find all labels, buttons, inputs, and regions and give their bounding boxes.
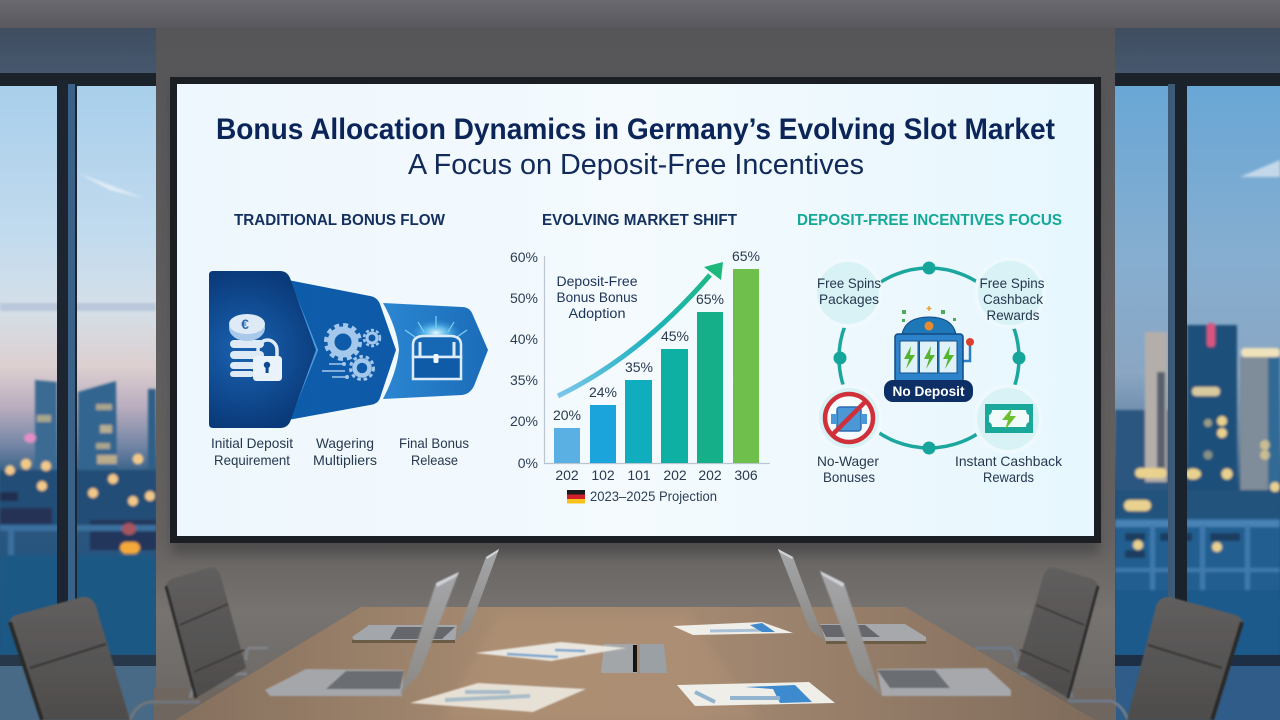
- y axis labels: 20%: [510, 413, 538, 429]
- x axis labels: 102: [591, 467, 615, 483]
- laptop: rear left: [352, 549, 499, 643]
- chevron: initial deposit: [209, 271, 316, 428]
- label: initial deposit requirement: [211, 435, 293, 468]
- label: final bonus release: [399, 435, 469, 468]
- y axis labels: 50%: [510, 290, 538, 306]
- bar value labels: 45%: [661, 328, 689, 344]
- icon: slot machine with no deposit badge: [884, 306, 974, 402]
- item: no-wager bonuses: Bonuses: [823, 469, 875, 485]
- x axis labels: 202: [698, 467, 722, 483]
- laptop: rear right: [778, 549, 926, 644]
- document: left rear: [475, 642, 626, 661]
- chevron: wagering multipliers: [288, 280, 396, 420]
- bar value labels: 35%: [625, 359, 653, 375]
- panel: deposit-free incentives focus: [797, 212, 1063, 485]
- table centre power unit: [601, 644, 667, 673]
- legend: projection with German flag: 2023–2025 Projection: [590, 489, 717, 504]
- item: no-wager bonuses: No-Wager: [817, 453, 879, 469]
- x axis labels: 306: [734, 467, 758, 483]
- heading: deposit-free incentives focus: DEPOSIT-FREE INCENTIVES FOCUS: [797, 212, 1062, 229]
- x axis labels: 202: [555, 467, 579, 483]
- item: no-wager bonuses: [817, 386, 881, 485]
- label: wagering multipliers: Wagering: [316, 435, 374, 451]
- label: initial deposit requirement: Requirement: [214, 452, 290, 468]
- chevron: final bonus release: [383, 303, 488, 399]
- laptop: front right: [820, 571, 1011, 696]
- bar value labels: [553, 248, 760, 423]
- x axis labels: [555, 467, 758, 483]
- screen frame shadow: [172, 84, 1099, 554]
- chart annotation: [556, 273, 638, 321]
- chart axes: [544, 256, 770, 464]
- y axis labels: 35%: [510, 372, 538, 388]
- screen bezel: [170, 77, 1101, 543]
- item: free spins cashback rewards: Cashback: [983, 291, 1044, 307]
- conference table: [175, 607, 1095, 720]
- item: free spins packages: [815, 260, 881, 326]
- bar value labels: 65%: [732, 248, 760, 264]
- subtitle: A Focus on Deposit-Free Incentives: [408, 149, 864, 181]
- chart annotation: Bonus Bonus: [556, 289, 638, 305]
- left window view: [0, 86, 156, 655]
- item: instant cashback rewards: Instant Cashback: [955, 453, 1063, 469]
- bar value labels: 24%: [589, 384, 617, 400]
- bar value labels: 20%: [553, 407, 581, 423]
- document: right rear: [673, 622, 793, 635]
- chair: rear left: [166, 568, 268, 698]
- label: final bonus release: Final Bonus: [399, 435, 469, 451]
- icon: gears: [322, 325, 380, 380]
- heading: evolving market shift: EVOLVING MARKET SHIFT: [542, 212, 737, 229]
- x axis labels: 202: [663, 467, 687, 483]
- item: free spins packages: Packages: [819, 291, 879, 307]
- title: Bonus Allocation Dynamics in Germany’s Evolving Slot Market: [216, 113, 1055, 146]
- y axis labels: 40%: [510, 331, 538, 347]
- y axis labels: [510, 249, 538, 471]
- label: wagering multipliers: [313, 435, 377, 468]
- chair: front left: [9, 597, 200, 720]
- icon: coins and padlock: [229, 314, 282, 381]
- icon: treasure chest: [405, 316, 467, 379]
- y axis labels: 60%: [510, 249, 538, 265]
- bar chart: [554, 269, 759, 463]
- y axis labels: 0%: [518, 455, 538, 471]
- arrow: growth trend: [558, 262, 723, 396]
- item: free spins cashback rewards: Free Spins: [980, 275, 1044, 291]
- icon: coins and padlock: €: [241, 316, 249, 332]
- item: instant cashback rewards: [955, 386, 1063, 485]
- chevron divider: [288, 280, 316, 420]
- label: wagering multipliers: Multipliers: [313, 452, 377, 468]
- ring: [839, 268, 1019, 448]
- bar value labels: 65%: [696, 291, 724, 307]
- screen surface: [177, 84, 1094, 536]
- label: final bonus release: Release: [411, 452, 458, 468]
- chair: rear right: [975, 568, 1098, 698]
- item: free spins cashback rewards: Rewards: [986, 307, 1040, 323]
- document: left front: [410, 683, 586, 712]
- chair: front right: [1068, 597, 1243, 720]
- table sheen: [440, 615, 760, 720]
- ring nodes: [834, 262, 1026, 454]
- transom above windows: [0, 28, 1280, 74]
- panel: evolving market shift: [510, 212, 770, 504]
- icon: slot machine with no deposit badge: No Deposit: [892, 383, 965, 399]
- wall: [156, 28, 1115, 700]
- item: instant cashback rewards: Rewards: [983, 469, 1034, 485]
- heading: traditional bonus flow: TRADITIONAL BONUS FLOW: [234, 212, 446, 229]
- laptop: front left: [265, 572, 459, 696]
- document: right front: [677, 682, 835, 706]
- skirting: [154, 688, 1116, 720]
- item: free spins packages: Free Spins: [817, 275, 881, 291]
- item: free spins cashback rewards: [976, 259, 1044, 327]
- chart annotation: Deposit-Free: [556, 273, 638, 289]
- panel: traditional bonus flow: [209, 212, 488, 468]
- ceiling: [0, 0, 1280, 30]
- chart annotation: Adoption: [568, 305, 626, 321]
- label: initial deposit requirement: Initial Deposit: [211, 435, 293, 451]
- x axis labels: 101: [627, 467, 651, 483]
- right window view: [1115, 86, 1280, 655]
